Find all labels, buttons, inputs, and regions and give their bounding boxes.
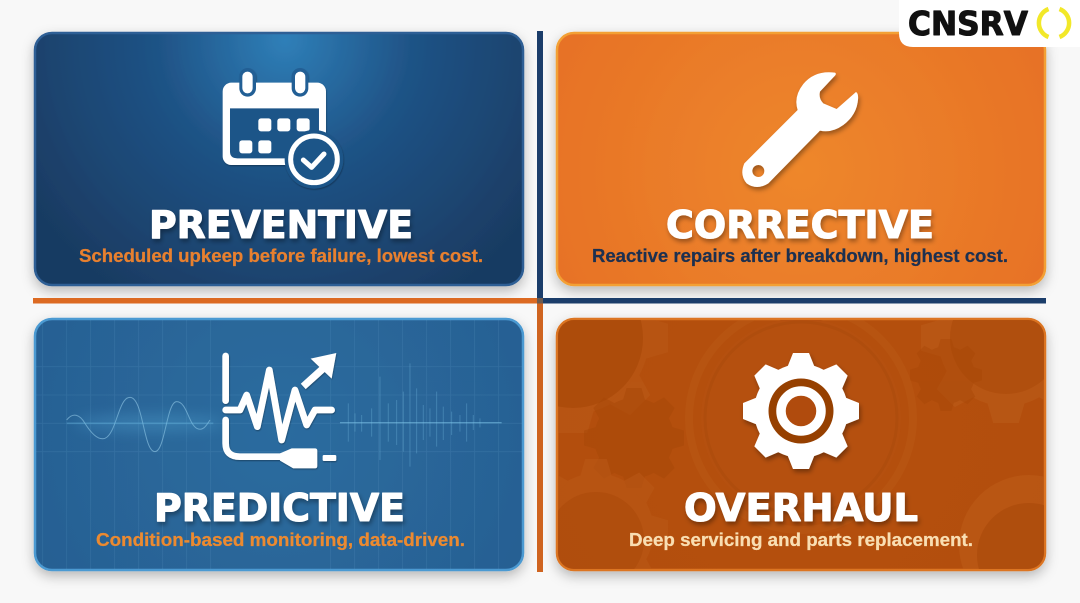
text: preventive description: Scheduled upkeep before failure, lowest cost. <box>79 246 483 266</box>
panel: corrective <box>557 33 1045 285</box>
text: logo wordmark: CNSRV <box>908 4 1028 43</box>
icon: calendar with check <box>223 68 343 189</box>
chart: background waveform and grid <box>33 320 527 573</box>
icon: sensor trend chart <box>226 353 336 468</box>
decoration: background gears <box>558 320 1044 569</box>
icon: logo ring <box>1039 9 1069 37</box>
heading: predictive: PREDICTIVE <box>154 486 405 531</box>
text: predictive description: Condition-based monitoring, data-driven. <box>96 530 465 550</box>
panel: predictive <box>33 319 527 573</box>
panel: overhaul <box>549 316 1053 583</box>
text: overhaul description: Deep servicing and parts replacement. <box>629 530 973 550</box>
panel: preventive <box>35 33 523 285</box>
logo: CNSRV <box>899 0 1080 47</box>
icon: wrench <box>742 72 858 187</box>
heading: corrective: CORRECTIVE <box>666 203 934 248</box>
icon: gear <box>743 353 859 469</box>
text: corrective description: Reactive repairs after breakdown, highest cost. <box>592 246 1008 266</box>
heading: overhaul: OVERHAUL <box>684 486 918 531</box>
heading: preventive: PREVENTIVE <box>149 203 413 248</box>
